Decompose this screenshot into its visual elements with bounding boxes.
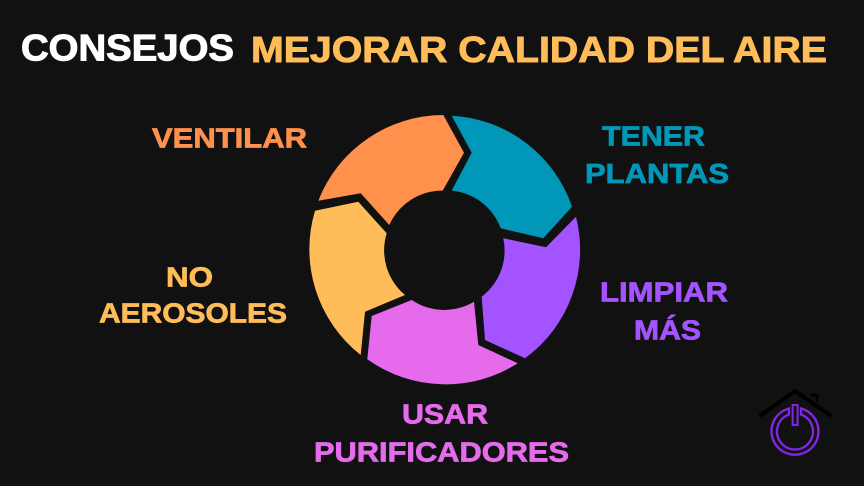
label: usar purificadores: USAR <box>402 398 488 430</box>
label: no aerosoles: NO <box>166 262 213 292</box>
label: usar purificadores <box>314 398 569 468</box>
label: no aerosoles: AEROSOLES <box>99 298 287 328</box>
label: limpiar mas: MÁS <box>634 314 701 346</box>
title: consejos: CONSEJOS <box>21 28 234 68</box>
label: ventilar: VENTILAR <box>152 122 307 154</box>
segment: usar purificadores <box>367 300 518 384</box>
label: no aerosoles <box>99 262 287 328</box>
label: limpiar mas: LIMPIAR <box>600 276 728 308</box>
label: limpiar mas <box>600 276 728 346</box>
label: tener plantas: PLANTAS <box>585 158 729 189</box>
segment: limpiar mas <box>482 217 580 358</box>
label: usar purificadores: PURIFICADORES <box>314 436 569 468</box>
label: tener plantas: TENER <box>602 120 705 152</box>
label: tener plantas <box>585 120 729 189</box>
title: mejorar calidad del aire: MEJORAR CALIDAD DEL AIRE <box>251 29 827 70</box>
segment: tener plantas <box>452 116 572 238</box>
cycle diagram <box>309 115 580 384</box>
icon: house with power button <box>761 391 830 455</box>
segment: no aerosoles <box>309 202 405 355</box>
segment: ventilar <box>318 115 464 225</box>
